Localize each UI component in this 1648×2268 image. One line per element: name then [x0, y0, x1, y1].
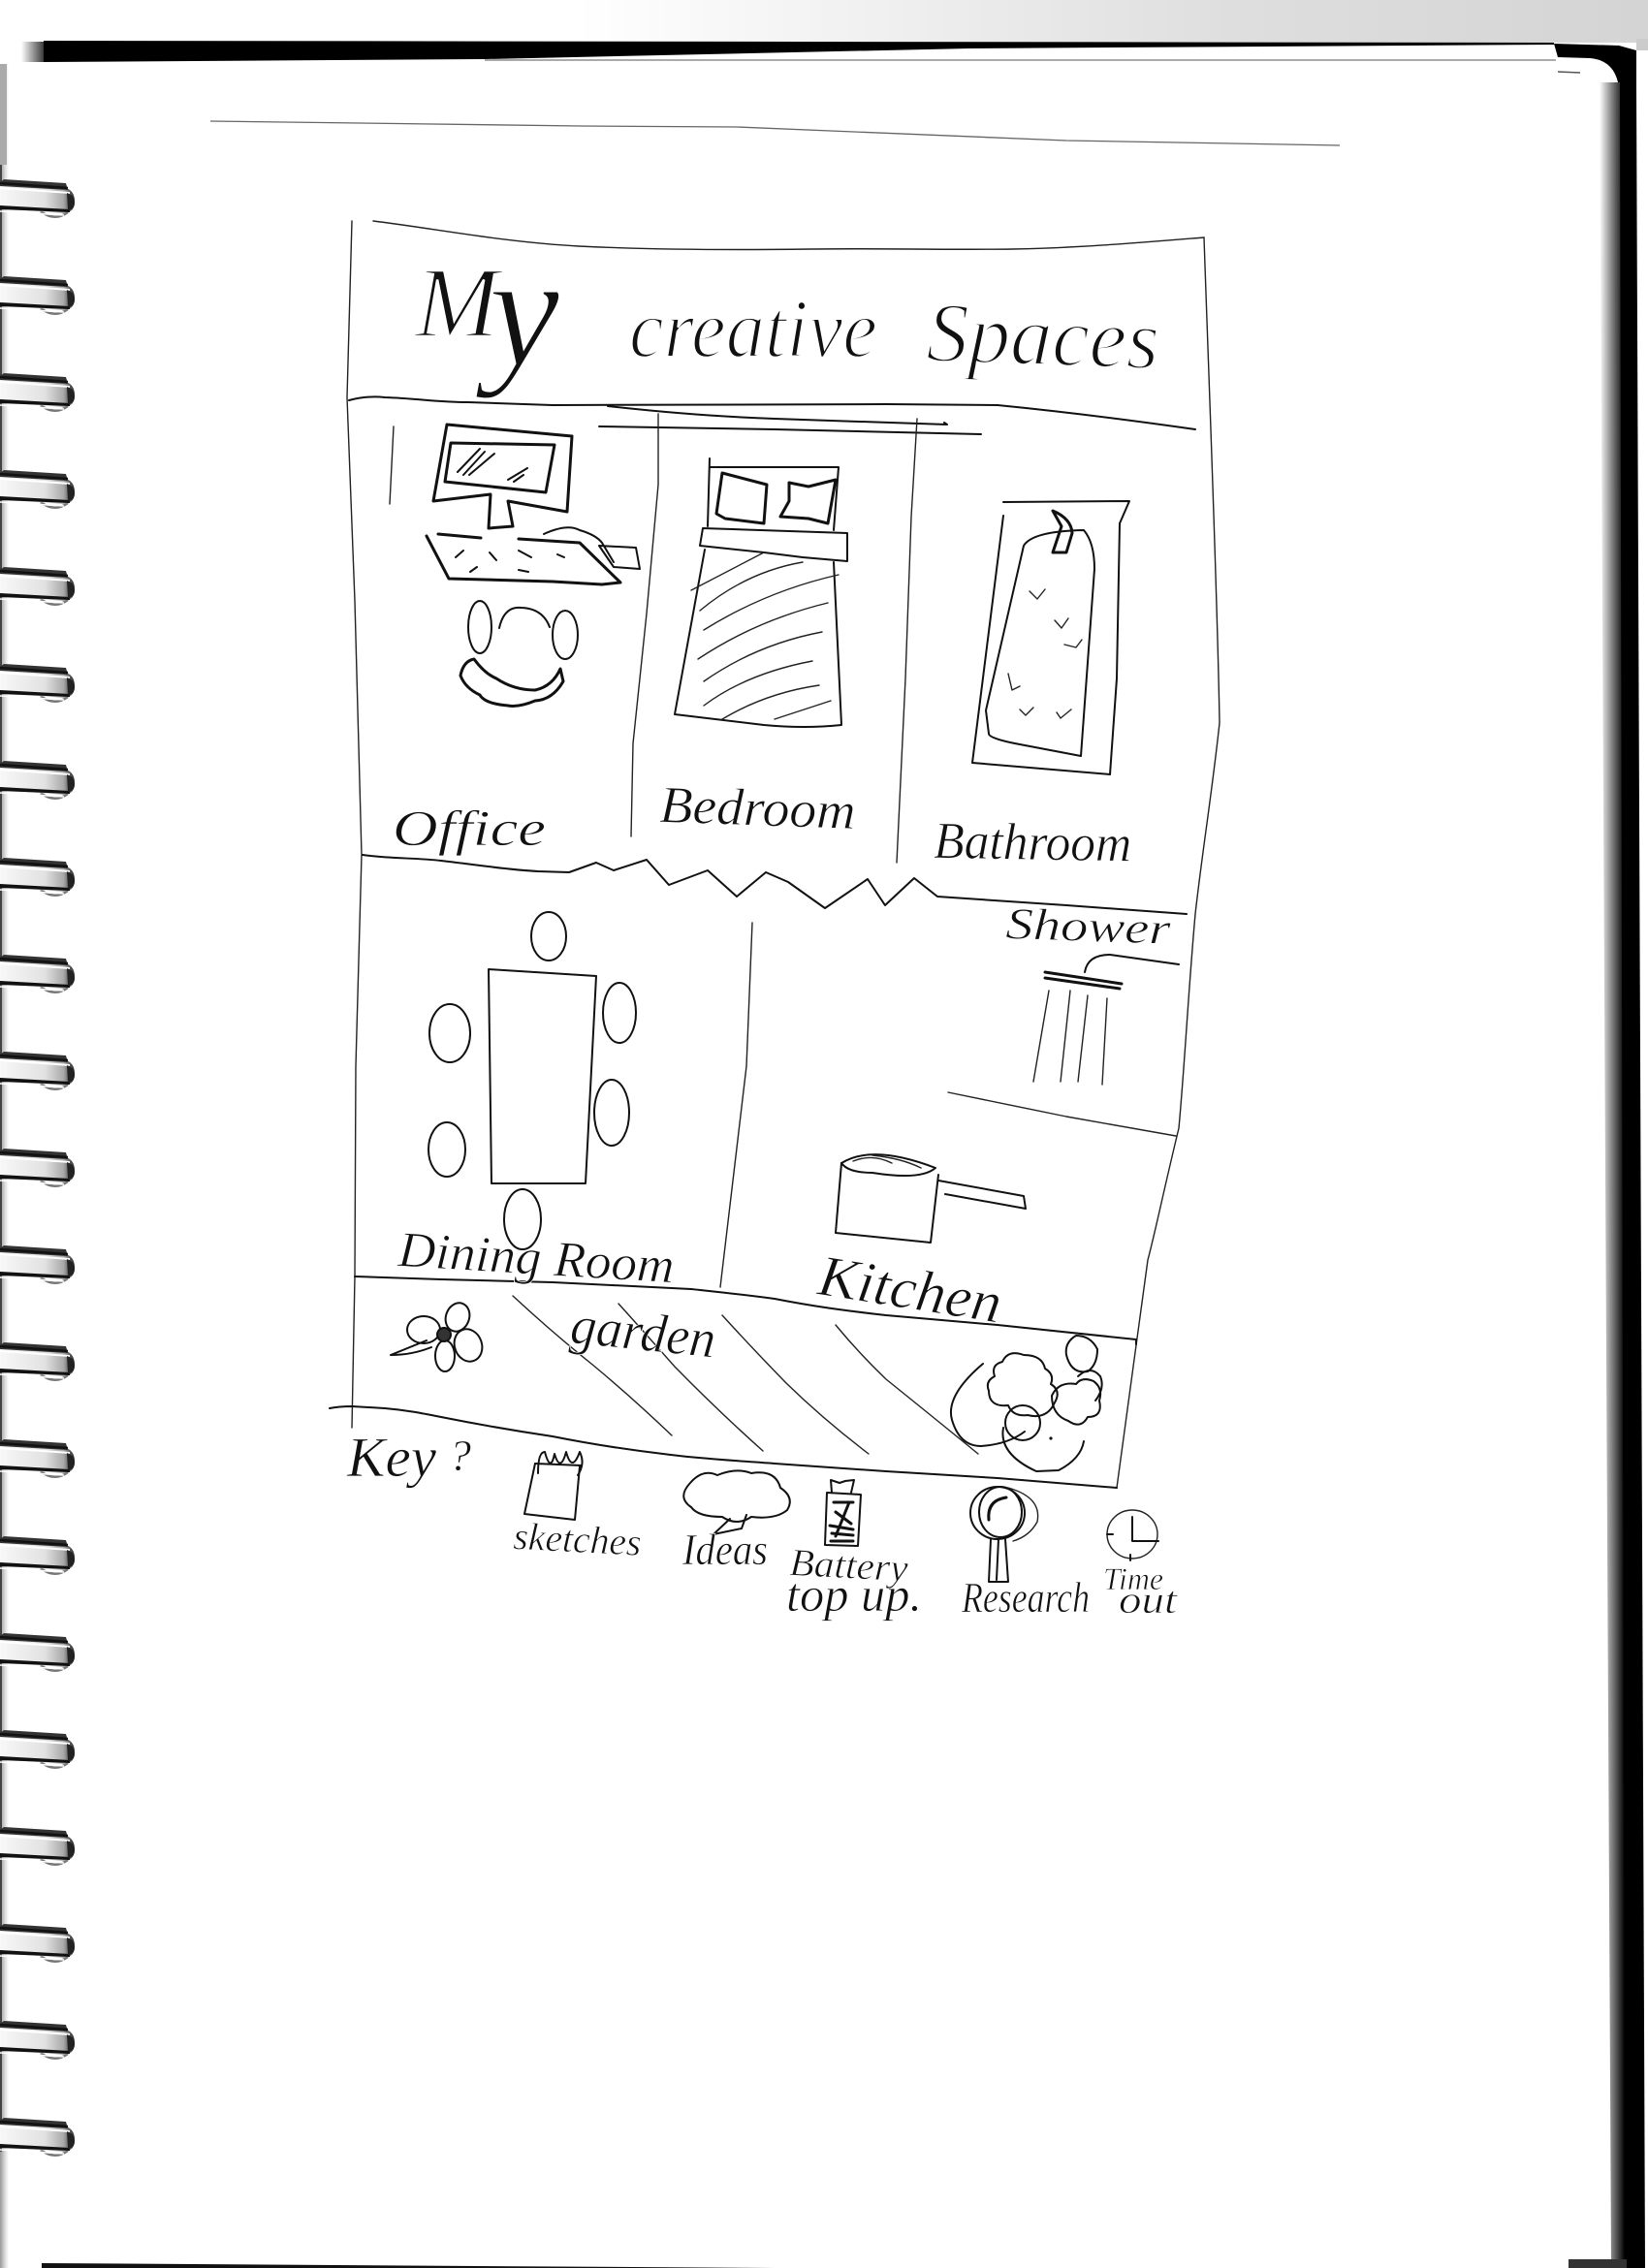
icon: shower head [1033, 955, 1179, 1085]
key item: research [961, 1487, 1090, 1622]
key item: ideas: Ideas [681, 1525, 768, 1574]
key [346, 1426, 1178, 1622]
icon: computer monitor [433, 425, 572, 528]
label: Kitchen: Kitchen [813, 1243, 1006, 1336]
label: Bedroom: Bedroom [659, 775, 857, 840]
icon: flower [391, 1300, 487, 1371]
icon: office chair [460, 601, 578, 706]
key item: time out [1103, 1510, 1178, 1622]
panel: kitchen [813, 1154, 1026, 1336]
label: garden: garden [568, 1295, 718, 1370]
panel: bathroom [934, 501, 1132, 873]
title: Spaces [925, 286, 1161, 388]
title: creative [629, 282, 877, 375]
key item: battery top up: Battery [789, 1540, 909, 1590]
key item: ideas [681, 1470, 790, 1574]
icon: bush and pond [951, 1336, 1102, 1471]
title: y [475, 222, 560, 399]
key item: research: Research [961, 1574, 1090, 1622]
key item: sketches [513, 1452, 643, 1564]
panel: shower [1005, 898, 1179, 1085]
title: M [413, 247, 504, 359]
panel: office [390, 425, 640, 857]
label: Bathroom: Bathroom [934, 811, 1132, 873]
label: Office: Office [393, 802, 546, 857]
panel: bedroom [659, 458, 857, 840]
question mark: ? [449, 1431, 471, 1480]
icon: dining table with chairs [428, 912, 636, 1249]
label: Dining Room: Dining Room [396, 1222, 676, 1294]
icon: keyboard and mouse [427, 527, 640, 584]
label: Shower: Shower [1005, 898, 1173, 954]
key item: sketches: sketches [513, 1514, 643, 1564]
key item: battery top up [786, 1480, 922, 1622]
icon: saucepan [836, 1154, 1026, 1243]
key item: battery top up: top up. [786, 1567, 922, 1622]
garden path lines [513, 1296, 978, 1454]
key item: time out: out [1119, 1578, 1178, 1622]
key item: time out: Time [1103, 1562, 1163, 1597]
label: Key: Key [346, 1426, 436, 1489]
icon: bath [972, 501, 1129, 774]
title [413, 222, 1161, 399]
panel: garden [391, 1295, 1102, 1471]
page rule line [210, 121, 1340, 145]
icon: bed [675, 458, 847, 727]
sketch outer frame [347, 221, 1220, 1488]
panel: dining room [396, 912, 676, 1294]
title underline and room dividers [330, 396, 1195, 1488]
spiral binding rings [0, 179, 75, 2156]
